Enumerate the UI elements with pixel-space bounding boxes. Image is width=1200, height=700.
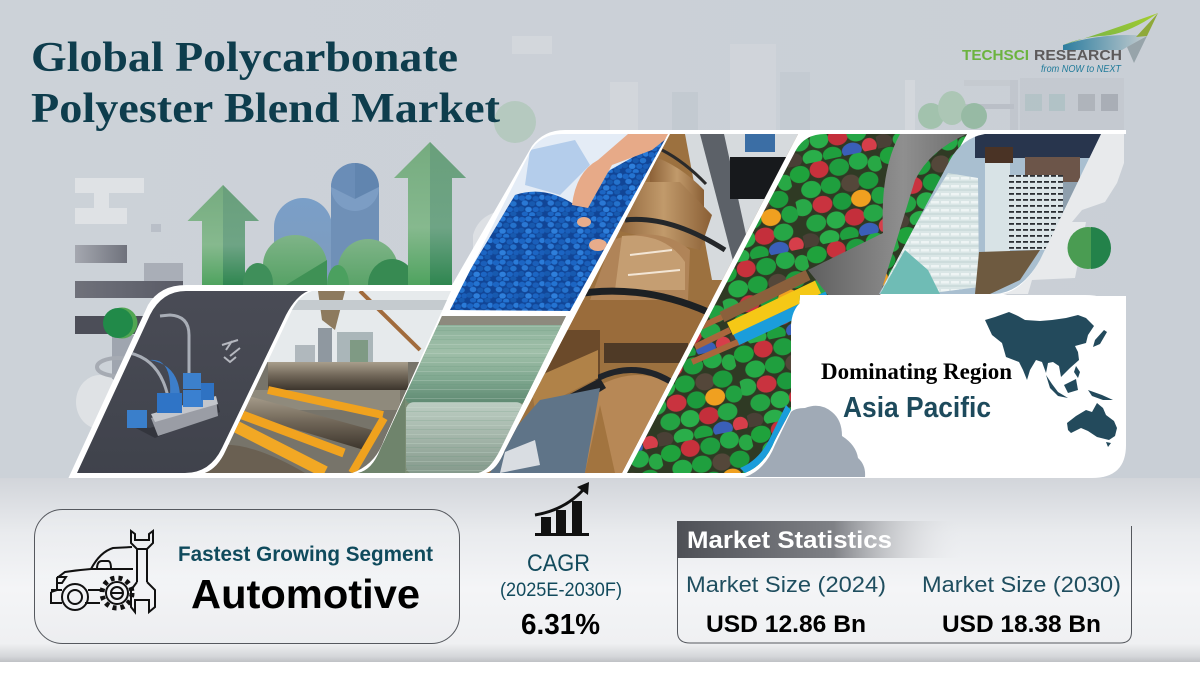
icon: green circle right <box>1068 227 1111 269</box>
panel: brown moulded parts photo <box>480 130 805 475</box>
growth illustration: arrows and bushes <box>188 142 466 285</box>
logo: TechSci Research <box>962 13 1158 75</box>
panel: market statistics <box>677 521 1132 643</box>
light decorative shape right of photos <box>1000 134 1124 294</box>
text: Fastest Growing Segment: Fastest Growing Segment <box>178 543 433 566</box>
upper background panel <box>0 0 1200 480</box>
icon: rising bar chart <box>535 482 589 536</box>
icon: car with wrench and gear <box>51 531 155 612</box>
logo: TechSci Research: from NOW to NEXT <box>1041 63 1122 75</box>
icon: green circle on left post <box>103 308 138 338</box>
logo: TechSci Research: TECHSCI <box>962 47 1029 64</box>
panel: green film rolls photo <box>350 316 570 476</box>
text: forecast period: (2025E-2030F) <box>500 580 622 601</box>
panel: fastest growing segment <box>34 510 460 644</box>
panel: white plastic mesh photo <box>875 130 1105 300</box>
text: Asia Pacific: Asia Pacific <box>843 392 991 424</box>
text: Market Statistics: Market Statistics <box>687 527 892 554</box>
background decoration: left blocks and bars <box>75 178 183 429</box>
text: market size 2024 value: USD 12.86 Bn <box>706 611 866 638</box>
panel: colourful plastic pellets and cable photo <box>620 130 970 475</box>
text: market size 2024 label: Market Size (2024) <box>686 572 886 597</box>
icon: Asia Pacific map <box>985 312 1117 447</box>
text: market size 2030 value: USD 18.38 Bn <box>942 611 1101 638</box>
text: Automotive: Automotive <box>191 571 420 617</box>
panel: dark 3D machine illustration <box>77 291 308 473</box>
decorative pale shape behind pellets <box>473 210 513 300</box>
icon: grey cloud decoration <box>745 406 865 477</box>
panel: blue pellets photo <box>450 134 668 311</box>
text: CAGR value: 6.31% <box>521 609 600 641</box>
title <box>31 35 500 132</box>
panel: factory rollers photo <box>205 291 451 473</box>
bottom info band <box>0 478 1200 662</box>
text: CAGR: CAGR <box>527 550 590 577</box>
text: Dominating Region: Dominating Region <box>821 359 1012 384</box>
panel: CAGR <box>500 482 622 641</box>
text: market size 2030 label: Market Size (2030) <box>922 572 1121 597</box>
logo: TechSci Research: RESEARCH <box>1034 47 1122 64</box>
background decoration: faint skyline top right <box>494 36 1124 143</box>
title: Global Polycarbonate <box>31 35 458 81</box>
header bar <box>677 521 962 558</box>
white frame behind photo strip <box>68 130 1126 479</box>
title: Polyester Blend Market <box>31 86 500 132</box>
panel: dominating region card <box>745 295 1126 477</box>
